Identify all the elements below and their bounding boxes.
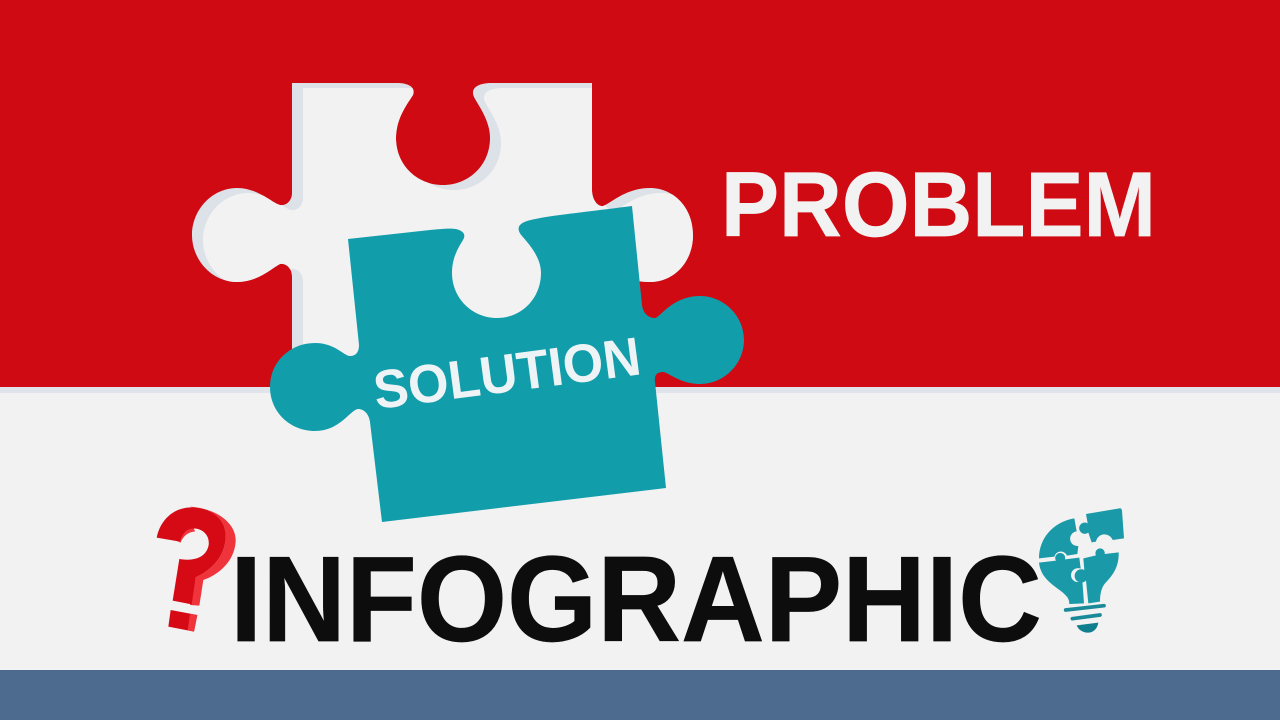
heading: problem: PROBLEM [721,153,1156,256]
heading: infographic: INFOGRAPHIC [230,531,1042,668]
label: solution: SOLUTION [370,327,644,421]
icon: white puzzle piece [192,83,693,356]
icon: red question mark [157,507,236,632]
footer bar [0,670,1280,720]
panel: red problem band [0,0,1280,393]
icon: puzzle light bulb [1039,508,1124,633]
icon: teal puzzle piece [270,206,744,522]
